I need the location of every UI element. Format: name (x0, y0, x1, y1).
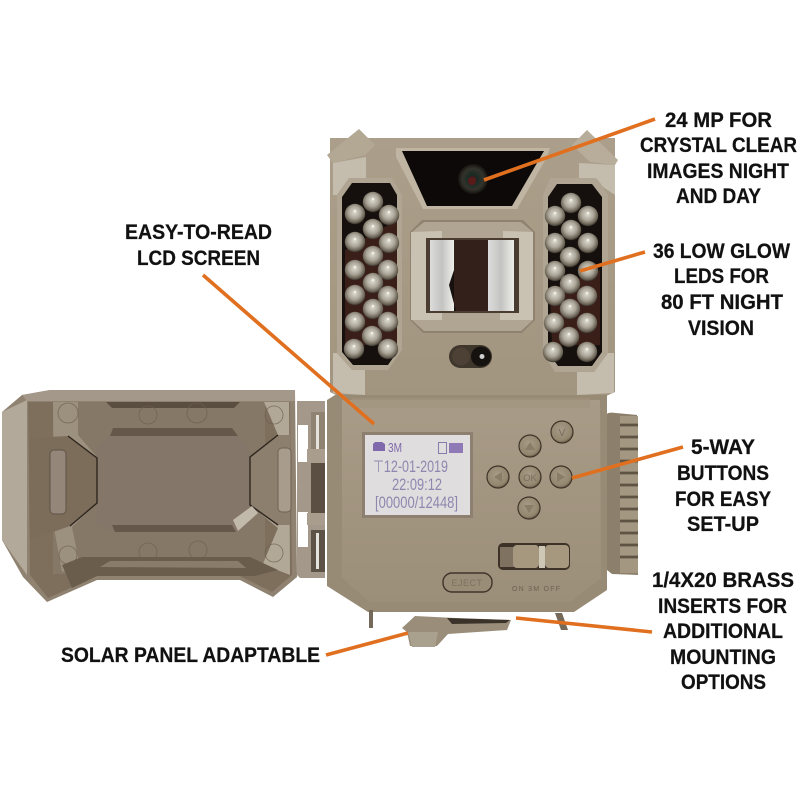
five-way buttons: OK (523, 473, 538, 484)
label: brass inserts: 1/4X20 BRASS (652, 569, 794, 592)
label: 24 MP: 24 MP FOR (665, 109, 772, 132)
label: LCD screen: EASY-TO-READ (125, 221, 272, 244)
label: five-way buttons (675, 436, 771, 536)
mounting legs (369, 610, 568, 630)
latch on the right side (607, 413, 638, 575)
arrow: brass inserts (516, 618, 652, 632)
eject button (443, 573, 492, 592)
open door of the camera housing (2, 390, 325, 602)
label: 36 LEDs: VISION (688, 317, 754, 340)
label: five-way buttons: 5-WAY (691, 436, 755, 459)
corner cap left (327, 129, 375, 163)
date: ⊤12-01-2019 (373, 458, 448, 476)
door lower lip (62, 557, 278, 588)
five-way buttons (487, 421, 573, 519)
door left bracket (53, 402, 97, 572)
eject button: EJECT (451, 578, 483, 588)
upper body (330, 138, 615, 397)
door screw bosses (58, 403, 283, 564)
right LED panel (543, 178, 608, 372)
label: brass inserts: ADDITIONAL (663, 620, 783, 643)
status row: 3M (388, 440, 402, 455)
lower body (327, 395, 607, 612)
label: five-way buttons: FOR EASY (675, 488, 771, 511)
door hinges (297, 401, 325, 578)
light sensor (449, 345, 492, 368)
label: 24 MP (640, 109, 797, 208)
slide switch: ON 3M OFF (512, 586, 560, 593)
label: brass inserts: MOUNTING (670, 646, 776, 669)
arrow: LEDs (580, 252, 645, 271)
lower front face (342, 400, 601, 602)
label: solar panel: SOLAR PANEL ADAPTABLE (61, 644, 320, 667)
label: 36 LEDs: 80 FT NIGHT (661, 291, 783, 314)
counter: [00000/12448] (375, 494, 458, 512)
motion sensor frame (410, 220, 535, 333)
label: 24 MP: IMAGES NIGHT (647, 160, 789, 183)
label: brass inserts (652, 569, 794, 694)
label: five-way buttons: BUTTONS (677, 462, 769, 485)
label: 24 MP: AND DAY (676, 185, 761, 208)
left LED panel (337, 178, 402, 370)
label: 36 LEDs: 36 LOW GLOW (653, 240, 790, 263)
door right bracket (250, 402, 290, 575)
solar port and mount (402, 616, 511, 647)
arrow: camera lens (484, 119, 655, 180)
label: brass inserts: INSERTS FOR (658, 595, 787, 618)
LCD screen (362, 432, 473, 518)
slide switch (498, 543, 570, 593)
door interior floor (28, 402, 292, 598)
label: five-way buttons: SET-UP (687, 513, 759, 536)
corner cap right (572, 130, 618, 165)
label: LCD screen (125, 221, 272, 270)
lighter side strips (333, 157, 615, 395)
time: 22:09:12 (392, 476, 442, 494)
motion sensor lens (430, 240, 454, 311)
lens window (396, 148, 550, 209)
arrow: LCD screen (203, 275, 374, 424)
camera lens (458, 164, 488, 194)
five-way buttons: V (559, 428, 566, 439)
label: LCD screen: LCD SCREEN (137, 247, 260, 270)
camera front housing (327, 129, 618, 647)
label: 36 LEDs (653, 240, 790, 340)
arrow: solar panel port (326, 633, 408, 655)
arrow: five-way buttons (572, 447, 683, 478)
door outer shell (2, 390, 297, 602)
label: 36 LEDs: LEDS FOR (674, 265, 769, 288)
door tab (233, 506, 258, 531)
label: brass inserts: OPTIONS (681, 671, 766, 694)
